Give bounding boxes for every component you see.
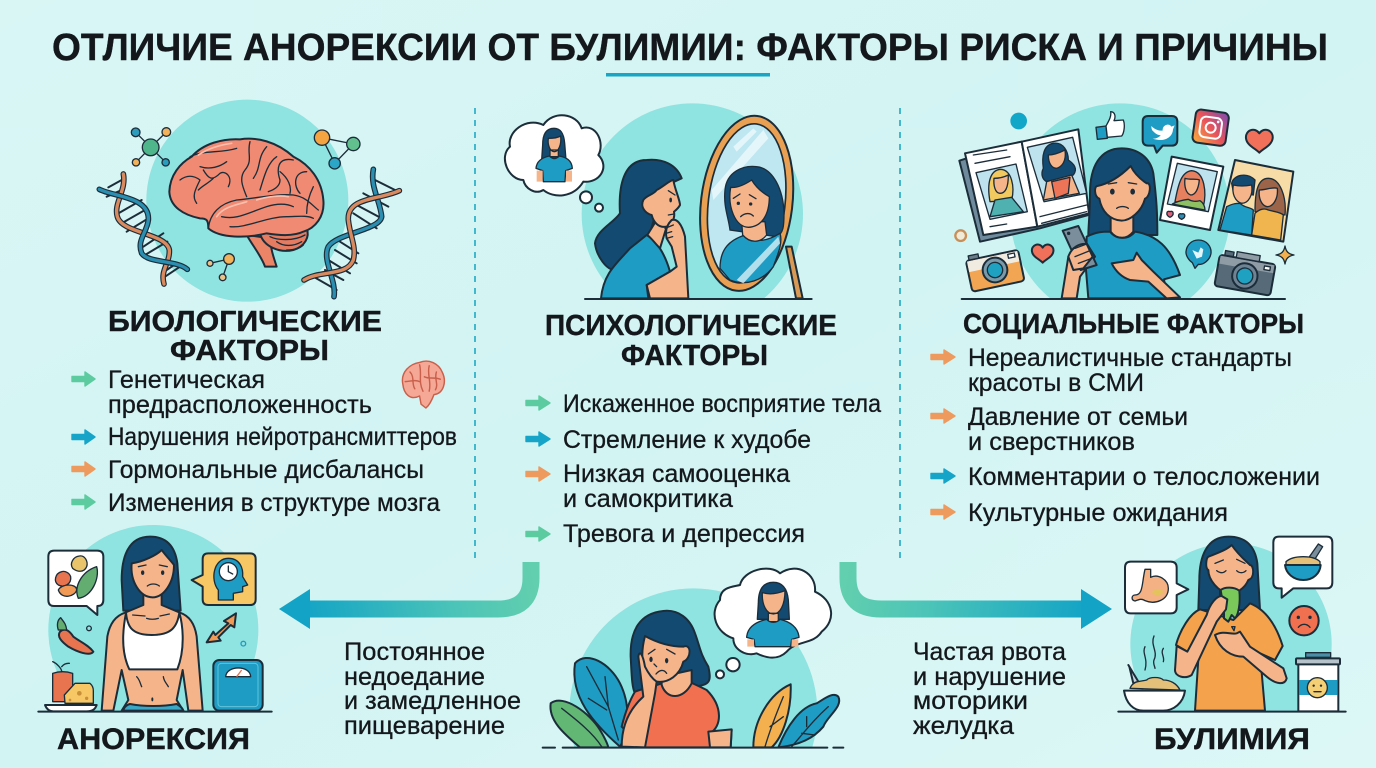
mirror stand [786, 247, 803, 298]
text: bulimia consequence: и нарушение [913, 663, 1066, 691]
text: bulimia consequence: моторики [913, 687, 1028, 715]
magazine [959, 158, 1088, 242]
list: biological factors: Нарушения нейротрансмиттеров [108, 423, 457, 451]
star [1276, 246, 1294, 264]
heading: social factors: СОЦИАЛЬНЫЕ ФАКТОРЫ [963, 308, 1304, 339]
text: anorexia consequence: Постоянное [344, 638, 485, 666]
list: social factors: и сверстников [968, 428, 1135, 456]
polaroid [1160, 157, 1223, 230]
text: anorexia consequence: и замедленное [344, 687, 521, 715]
small bubble [1186, 240, 1211, 268]
couple photo [1218, 160, 1293, 242]
list: psychological factors: Тревога и депрессия [563, 520, 805, 548]
list: psychological factors: Стремление к худобе [563, 426, 811, 454]
illustration: brain and DNA [99, 100, 399, 302]
panel: social factors [931, 103, 1320, 527]
title: ОТЛИЧИЕ АНОРЕКСИИ ОТ БУЛИМИИ: ФАКТОРЫ РИСКА И ПРИЧИНЫ [52, 27, 1328, 69]
panel: anorexia [38, 525, 272, 756]
list: biological factors [72, 366, 457, 517]
camera left [965, 246, 1025, 292]
list: psychological factors: Искаженное восприятие тела [563, 390, 881, 418]
woman [595, 160, 682, 270]
arrow: to bulimia [848, 562, 1112, 629]
thumbs up [1096, 126, 1107, 139]
label: bulimia: БУЛИМИЯ [1154, 723, 1310, 756]
list: psychological factors: и самокритика [563, 485, 733, 513]
instagram [1192, 109, 1229, 146]
illustration: woman and social media [955, 103, 1294, 323]
illustration: woman thinking about her body [543, 569, 843, 748]
twitter bubble [1143, 116, 1177, 153]
camera right [1214, 249, 1277, 296]
list: biological factors: предрасположенность [108, 391, 372, 419]
arrow: to anorexia [279, 562, 531, 629]
list: social factors: Давление от семьи [968, 403, 1188, 431]
heading: psychological factors: ПСИХОЛОГИЧЕСКИЕ [545, 310, 837, 342]
list: psychological factors: Низкая самооценка [563, 460, 790, 488]
illustration: bulimia [1117, 536, 1347, 713]
text: anorexia consequence [344, 638, 521, 740]
list: biological factors: Изменения в структуре мозга [108, 489, 440, 517]
text: bulimia consequence [913, 638, 1066, 740]
list: social factors: Комментарии о телосложении [968, 463, 1320, 491]
hearts [1246, 130, 1273, 153]
list: biological factors: Генетическая [108, 366, 265, 394]
list: social factors: Нереалистичные стандарты [968, 344, 1292, 372]
heading: biological factors [108, 306, 382, 367]
heading: biological factors: ФАКТОРЫ [170, 335, 329, 367]
text: bulimia consequence: желудка [913, 712, 1014, 740]
woman [1088, 148, 1157, 235]
text: anorexia consequence: недоедание [344, 663, 485, 691]
illustration: anorexia [38, 525, 272, 735]
heading: psychological factors [545, 310, 837, 372]
heading: psychological factors: ФАКТОРЫ [621, 340, 768, 372]
panel: biological factors [72, 100, 457, 517]
text: anorexia consequence: пищеварение [344, 712, 505, 740]
panel: psychological factors [505, 103, 881, 548]
list: biological factors: Гормональные дисбалансы [108, 456, 424, 484]
list: social factors: красоты в СМИ [968, 369, 1144, 397]
heading: biological factors: БИОЛОГИЧЕСКИЕ [108, 306, 382, 338]
icon: small brain [402, 361, 444, 408]
list: social factors [931, 344, 1320, 527]
text: bulimia consequence: Частая рвота [913, 638, 1066, 666]
illustration: woman at the mirror [504, 103, 813, 300]
panel: bulimia [1118, 537, 1346, 756]
label: anorexia: АНОРЕКСИЯ [57, 723, 250, 756]
list: social factors: Культурные ожидания [968, 499, 1228, 527]
list: psychological factors [526, 390, 881, 548]
thought bubble [505, 115, 603, 195]
